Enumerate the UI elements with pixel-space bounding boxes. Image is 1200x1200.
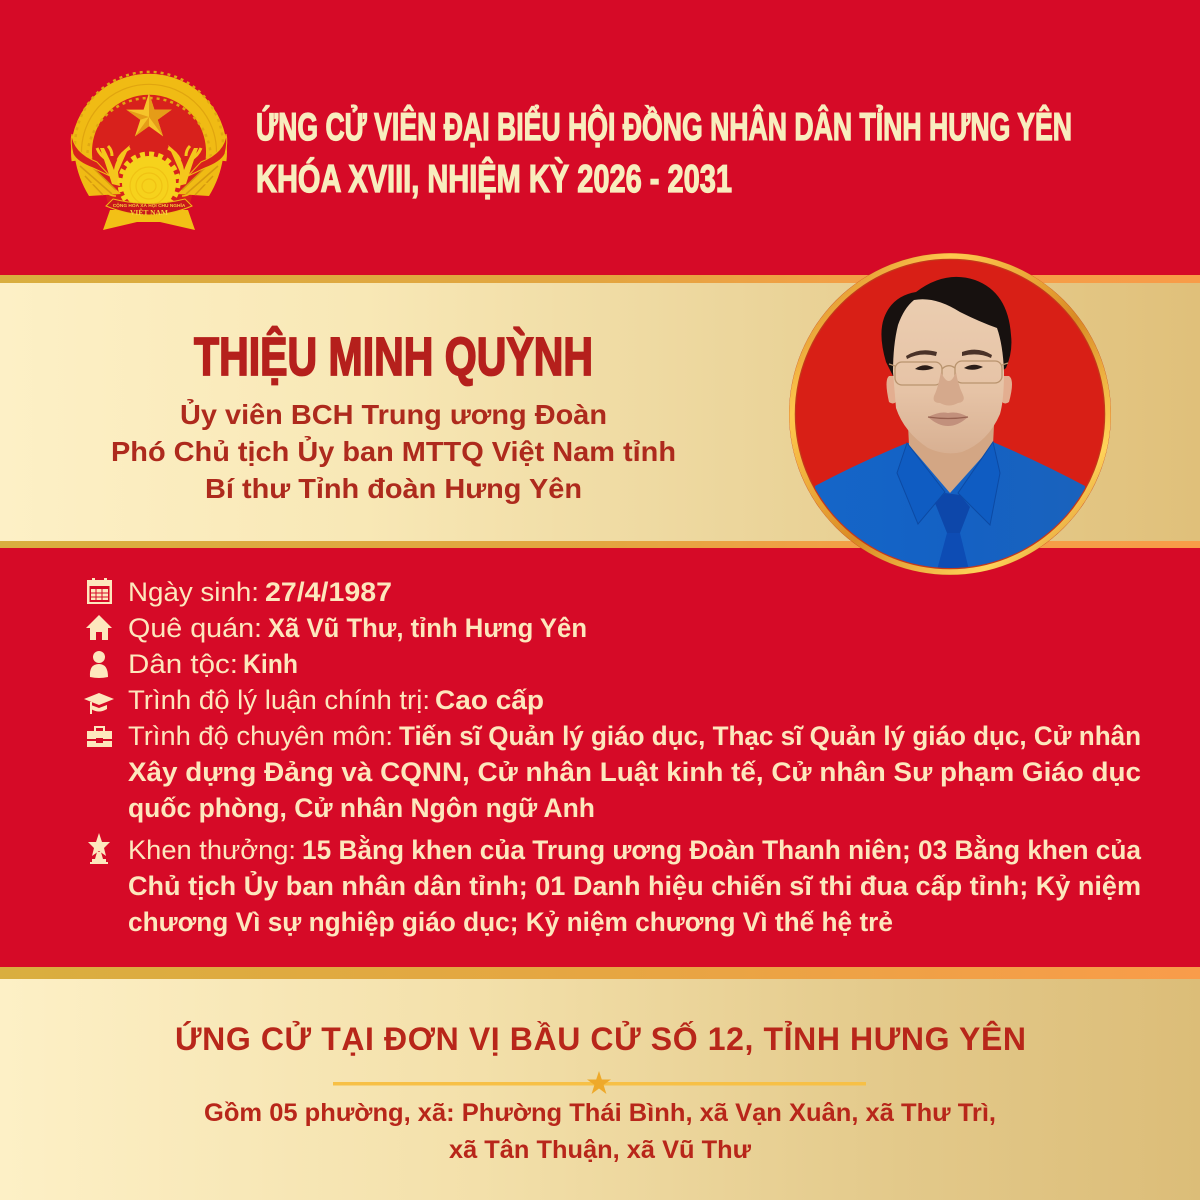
info: professional qualifications: Xây dựng Đảng và CQNN, Cử nhân Luật kinh tế, Cử nhân Sư phạm Giáo dục [128, 757, 1141, 787]
footer wards list: xã Tân Thuận, xã Vũ Thư [449, 1136, 752, 1164]
info: professional qualifications: quốc phòng, Cử nhân Ngôn ngữ Anh [128, 793, 595, 823]
icon: national emblem: VIỆT NAM [130, 208, 168, 217]
icon: house [86, 615, 112, 640]
portrait photo [789, 253, 1111, 600]
info: political theory level: Trình độ lý luận chính trị: [128, 685, 430, 715]
icon: person [90, 651, 108, 678]
icon: national emblem [71, 72, 227, 230]
info: awards [128, 834, 1142, 937]
info: professional qualifications: Tiến sĩ Quản lý giáo dục, Thạc sĩ Quản lý giáo dục, Cử nhân [399, 721, 1141, 751]
info: ethnicity [128, 649, 298, 679]
footer wards list: Gồm 05 phường, xã: Phường Thái Bình, xã Vạn Xuân, xã Thư Trì, [204, 1099, 996, 1127]
icon: national emblem: CỘNG HÒA XÃ HỘI CHỦ NGHĨA [113, 201, 186, 209]
candidate positions [111, 398, 676, 504]
info: awards: Chủ tịch Ủy ban nhân dân tỉnh; 01 Danh hiệu chiến sĩ thi đua cấp tỉnh; Kỷ niệm [128, 869, 1141, 901]
candidate name: THIỆU MINH QUỲNH [194, 326, 593, 387]
panel: candidate band [0, 275, 1200, 548]
title: KHÓA XVIII, NHIỆM KỲ 2026 - 2031 [256, 157, 732, 201]
info: awards: Khen thưởng: [128, 835, 296, 865]
info: professional qualifications: Trình độ chuyên môn: [128, 721, 393, 751]
title [256, 104, 1072, 201]
info: political theory level: Cao cấp [435, 685, 544, 715]
info: hometown: Xã Vũ Thư, tỉnh Hưng Yên [268, 613, 587, 643]
info: professional qualifications [128, 721, 1141, 823]
footer wards list [204, 1099, 996, 1164]
footer heading: ỨNG CỬ TẠI ĐƠN VỊ BẦU CỬ SỐ 12, TỈNH HƯNG YÊN [175, 1021, 1026, 1057]
panel: constituency footer [0, 967, 1200, 1200]
info: awards: 15 Bằng khen của Trung ương Đoàn Thanh niên; 03 Bằng khen của [302, 834, 1142, 865]
icon: calendar [87, 578, 112, 604]
icon: award trophy star [88, 833, 110, 864]
info: date of birth: 27/4/1987 [265, 577, 392, 607]
info: date of birth: Ngày sinh: [128, 577, 259, 607]
candidate positions: Ủy viên BCH Trung ương Đoàn [180, 398, 607, 430]
candidate positions: Bí thư Tỉnh đoàn Hưng Yên [205, 473, 582, 504]
info: ethnicity: Kinh [243, 649, 298, 679]
icon: graduation cap [84, 693, 114, 714]
star divider [333, 1071, 866, 1094]
info: hometown: Quê quán: [128, 613, 262, 643]
info: hometown [128, 613, 587, 643]
info: date of birth [128, 577, 392, 607]
info: ethnicity: Dân tộc: [128, 649, 238, 679]
icon: briefcase [87, 726, 112, 747]
info: awards: chương Vì sự nghiệp giáo dục; Kỷ niệm chương Vì thế hệ trẻ [128, 907, 893, 937]
candidate positions: Phó Chủ tịch Ủy ban MTTQ Việt Nam tỉnh [111, 435, 676, 467]
